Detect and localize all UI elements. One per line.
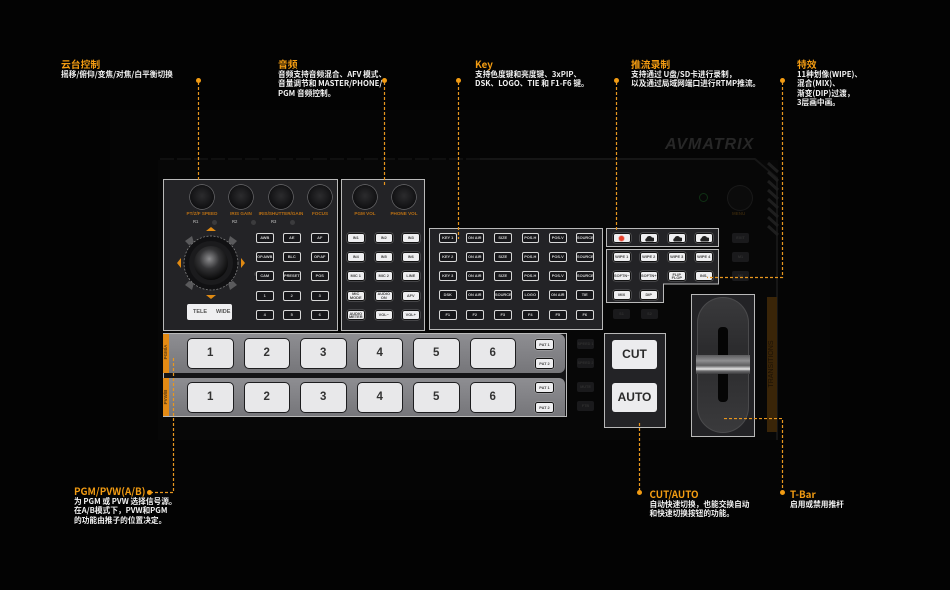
PGM number buttons: 3 xyxy=(320,347,326,359)
audio button grid: IN4 xyxy=(353,254,359,259)
text: effects caption xyxy=(797,57,862,108)
PGM number buttons: 4 xyxy=(377,347,383,359)
PGM number buttons: 6 xyxy=(490,347,496,359)
audio button grid: IN6 xyxy=(408,254,414,259)
panel: key: POS.V xyxy=(552,254,564,259)
dim system buttons: S1 xyxy=(619,312,624,316)
callout: key line xyxy=(456,78,461,239)
PTZ button grid xyxy=(256,233,329,320)
PGM number buttons: 2 xyxy=(264,347,270,359)
dim system buttons: EXIT xyxy=(736,236,745,240)
PTZ button grid: POS xyxy=(316,273,324,278)
PGM row xyxy=(163,334,565,373)
panel: key: ON AIR xyxy=(468,254,481,259)
pattern buttons: PAT 1 xyxy=(539,342,550,347)
callout: T-Bar line xyxy=(724,418,785,495)
panel: PGM / PVW source rows xyxy=(163,333,567,417)
callout: audio line xyxy=(382,78,387,185)
menu label: MENU xyxy=(732,211,745,216)
audio button grid: MIC xyxy=(352,291,359,296)
audio button grid: IN2 xyxy=(381,235,387,240)
stream button 2 xyxy=(668,233,686,243)
panel: key: KEY 2 xyxy=(442,254,453,259)
text: key caption xyxy=(475,57,589,89)
panel: CUT / AUTO xyxy=(604,333,666,428)
panel: transition effects: WIPE 2 xyxy=(642,254,655,259)
knob: iris gain xyxy=(229,185,253,209)
pattern buttons: PAT 2 xyxy=(539,361,550,366)
text: PGM caption: 在A/B模式下，PVW和PGM xyxy=(74,505,167,516)
text: streaming caption: 支持通过 U盘/SD卡进行录制， xyxy=(631,69,736,80)
brand logo: AVMATRIX xyxy=(665,136,754,153)
knob: phone volume xyxy=(392,185,416,209)
text: T-Bar caption: 启用或禁用推杆 xyxy=(790,498,844,510)
dim system buttons: M1 xyxy=(738,255,743,259)
CUT button xyxy=(612,340,657,369)
panel: key: SIZE xyxy=(498,235,507,240)
text: PGM caption xyxy=(74,484,177,526)
text: streaming caption xyxy=(631,57,760,89)
knob labels: IRIS GAIN xyxy=(230,211,252,216)
record button xyxy=(613,233,630,243)
panel: key: KEY 1 xyxy=(442,235,453,240)
text: audio caption: 音频支持音频混合、AFV 模式、 xyxy=(278,69,386,80)
PGM number buttons: 1 xyxy=(207,347,213,359)
audio button grid: AFV xyxy=(407,292,415,298)
text: key caption: Key xyxy=(475,57,493,71)
PVW row xyxy=(163,378,565,416)
TELE / WIDE rocker: TELE xyxy=(193,309,207,315)
text: effects caption: 3层画中画。 xyxy=(797,97,840,108)
panel: key: SOURCE xyxy=(577,273,594,278)
panel: key: POS.H xyxy=(524,273,536,278)
text: PGM caption: PGM/PVW(A/B) xyxy=(74,484,145,498)
TELE / WIDE rocker: WIDE xyxy=(216,309,230,315)
knob labels: PT/Z/F SPEED xyxy=(187,211,217,216)
panel: transition effects: SOFTN+ xyxy=(641,273,656,278)
T-Bar handle xyxy=(696,355,750,374)
panel: key: ON AIR xyxy=(551,292,564,297)
joystick xyxy=(177,227,245,299)
callout: CUT/AUTO line xyxy=(637,423,642,495)
text: T-Bar caption: T-Bar xyxy=(790,486,816,500)
PVW number buttons: 6 xyxy=(490,391,496,403)
PTZ button grid: 1 xyxy=(264,292,266,298)
PGM vertical label: PGM/A xyxy=(163,345,168,359)
panel: PTZ control xyxy=(163,179,338,331)
panel: key: F3 xyxy=(500,312,505,317)
PTZ button grid: 4 xyxy=(264,312,266,317)
knob: PGM volume xyxy=(353,185,377,209)
knob labels: FOCUS xyxy=(312,211,328,216)
panel: transition effects: FLOP xyxy=(672,275,682,280)
volume labels: PHONE VOL xyxy=(390,211,418,216)
PTZ button grid: AWB xyxy=(260,235,269,240)
text: streaming caption: 推流录制 xyxy=(631,57,670,71)
audio button grid: MIC 2 xyxy=(379,273,389,278)
panel: transition effects: INS. xyxy=(700,273,708,278)
PTZ button grid: PRESET xyxy=(284,273,300,278)
dim system buttons xyxy=(577,233,749,411)
panel: key xyxy=(429,228,603,330)
panel: key: KEY 3 xyxy=(442,273,453,278)
panel: key: DSK xyxy=(444,292,452,297)
panel: key: TIE xyxy=(582,292,588,297)
PTZ button grid: 6 xyxy=(319,312,321,317)
PTZ button grid: OP.AWB xyxy=(257,254,272,259)
text: CUT/AUTO caption: 和快速切换按钮的功能。 xyxy=(650,508,734,519)
encoder indicators: R2 xyxy=(232,219,237,224)
panel: key: SIZE xyxy=(498,254,507,259)
panel: key: F2 xyxy=(472,312,477,317)
panel: key: ON AIR xyxy=(468,292,481,297)
text: effects caption: 11种划像(WIPE)、 xyxy=(797,69,862,80)
audio button grid: VOL− xyxy=(379,312,389,317)
text: CUT/AUTO caption: 自动快速切换，也能交换自动 xyxy=(650,498,749,510)
panel: key: POS.V xyxy=(552,235,564,240)
PVW number buttons: 2 xyxy=(264,391,270,403)
PVW tag xyxy=(163,378,169,416)
knob: iris shutter gain xyxy=(269,185,293,209)
text: key caption: DSK、LOGO、TIE 和 F1-F6 键。 xyxy=(475,78,589,89)
PGM number buttons xyxy=(187,338,516,369)
text: effects caption: 特效 xyxy=(797,57,817,71)
knob: focus xyxy=(308,185,332,209)
PVW number buttons: 4 xyxy=(377,391,383,403)
panel: transition effects: WIPE 3 xyxy=(670,254,683,259)
text: effects caption: 混合(MIX)、 xyxy=(797,78,840,89)
panel: key: F6 xyxy=(582,312,587,317)
PVW number buttons xyxy=(187,382,516,413)
encoder indicators xyxy=(193,219,295,225)
panel: key: SIZE xyxy=(498,273,507,278)
panel: key: ON AIR xyxy=(468,235,481,240)
callout: streaming line xyxy=(614,78,619,230)
pattern buttons: PAT 1 xyxy=(539,385,550,390)
stream button 3 xyxy=(695,233,712,243)
audio button grid: ON xyxy=(381,295,387,300)
CUT button: CUT xyxy=(622,347,647,361)
panel: key: ON AIR xyxy=(468,273,481,278)
audio button grid: IN3 xyxy=(408,235,414,240)
text: key caption: 支持色度键和亮度键、3xPIP、 xyxy=(475,69,581,80)
knob labels xyxy=(186,211,328,216)
text: PTZ caption xyxy=(61,57,173,80)
audio button grid: LINE xyxy=(406,273,415,278)
volume labels: PGM VOL xyxy=(354,211,376,216)
panel: key: POS.H xyxy=(524,235,536,240)
panel: key: F4 xyxy=(528,312,533,317)
text: T-Bar caption xyxy=(790,486,844,510)
PTZ button grid: 5 xyxy=(291,312,293,317)
panel: T-Bar xyxy=(691,294,755,437)
text: audio caption: 音量调节和 MASTER/PHONE/ xyxy=(278,78,382,89)
panel: key: F5 xyxy=(555,312,560,317)
text: audio caption xyxy=(278,57,386,99)
callout: PGM line xyxy=(147,358,174,495)
panel: transition effects: MIX xyxy=(618,292,625,297)
PGM number buttons: 5 xyxy=(433,347,439,359)
panel: transition effects: WIPE 1 xyxy=(615,254,628,259)
PVW number buttons: 5 xyxy=(433,391,439,403)
knob: PT/Z/F speed xyxy=(190,185,214,209)
text: PTZ caption: 云台控制 xyxy=(61,57,100,71)
text: PTZ caption: 摇移/俯仰/变焦/对焦/白平衡切换 xyxy=(61,69,173,80)
panel: key: SOURCE xyxy=(577,235,594,240)
panel: key: POS.V xyxy=(552,273,564,278)
TELE / WIDE rocker xyxy=(187,304,232,320)
PTZ button grid: AF xyxy=(317,235,322,240)
T-Bar track xyxy=(697,297,749,433)
PTZ button grid: 2 xyxy=(291,292,293,298)
menu knob xyxy=(728,186,752,210)
PVW number buttons: 1 xyxy=(207,391,213,403)
encoder indicators: R1 xyxy=(193,219,198,224)
audio button grid: IN1 xyxy=(353,235,359,240)
text: audio caption: 音频 xyxy=(278,57,298,71)
callout: PTZ line xyxy=(196,78,201,180)
PGM tag xyxy=(163,334,169,373)
audio button grid xyxy=(346,232,421,321)
AUTO button xyxy=(612,383,657,412)
PVW vertical label: PVW/B xyxy=(163,390,168,404)
text: audio caption: PGM 音频控制。 xyxy=(278,88,335,99)
panel: key: SOURCE xyxy=(577,254,594,259)
transitions label strip xyxy=(767,297,777,432)
PTZ button grid: 3 xyxy=(319,292,321,298)
T-Bar slot xyxy=(718,327,728,402)
volume labels xyxy=(354,211,418,216)
pattern buttons: PAT 2 xyxy=(539,405,550,410)
callout: effects line xyxy=(707,78,785,278)
panel: streaming and recording xyxy=(606,228,719,247)
panel: audio xyxy=(341,179,425,331)
PVW number buttons: 3 xyxy=(320,391,326,403)
panel: transition effects: SOFTN− xyxy=(614,273,629,278)
PTZ button grid: CAM xyxy=(260,273,269,278)
text: PGM caption: 的功能由推子的位置决定。 xyxy=(74,515,166,526)
transitions label: TRANSITIONS xyxy=(768,340,775,388)
panel: transition effects xyxy=(606,249,719,303)
dim system buttons: M2 xyxy=(738,274,743,278)
panel: key: F1 xyxy=(445,312,450,317)
panel: key: LOGO xyxy=(525,292,536,297)
power icon xyxy=(699,193,708,202)
panel: key: POS.H xyxy=(524,254,536,259)
audio button grid: MODE xyxy=(350,295,362,300)
joystick indicator led xyxy=(254,272,258,276)
text: CUT/AUTO caption xyxy=(650,486,750,519)
panel: transition effects: DIP xyxy=(646,292,652,297)
knob labels: IRIS/SHUTTER/GAIN xyxy=(259,211,303,216)
PTZ button grid: AE xyxy=(289,235,294,240)
PTZ button grid: OP.AF xyxy=(314,254,325,259)
text: effects caption: 渐变(DIP)过渡， xyxy=(797,88,854,99)
stream button 1 xyxy=(640,233,658,243)
text: CUT/AUTO caption: CUT/AUTO xyxy=(650,486,699,500)
audio button grid: AUDIO xyxy=(349,310,362,316)
audio button grid: MIC 1 xyxy=(351,273,361,278)
AUTO button: AUTO xyxy=(618,390,651,404)
pattern buttons xyxy=(534,338,554,414)
dim system buttons: SPEED 1 xyxy=(577,342,594,346)
dim system buttons: SPEED 2 xyxy=(577,361,594,365)
audio button grid: VOL+ xyxy=(406,312,416,317)
audio button grid: AUDIO xyxy=(377,291,390,296)
dim system buttons: S2 xyxy=(647,312,652,316)
panel: key: SOURCE xyxy=(495,292,512,297)
panel: transition effects: WIPE 4 xyxy=(697,254,710,259)
dim system buttons: MUTE xyxy=(580,385,591,389)
audio button grid: METER xyxy=(349,314,363,319)
text: PGM caption: 为 PGM 或 PVW 选择信号源。 xyxy=(74,496,177,507)
text: streaming caption: 以及通过局域网端口进行RTMP推流。 xyxy=(631,78,760,89)
dim system buttons: FTB xyxy=(582,404,589,408)
PTZ button grid: BLC xyxy=(288,254,296,259)
panel: transition effects: FLIP xyxy=(673,272,681,276)
encoder indicators: R3 xyxy=(271,219,276,224)
audio button grid: IN5 xyxy=(381,254,387,259)
